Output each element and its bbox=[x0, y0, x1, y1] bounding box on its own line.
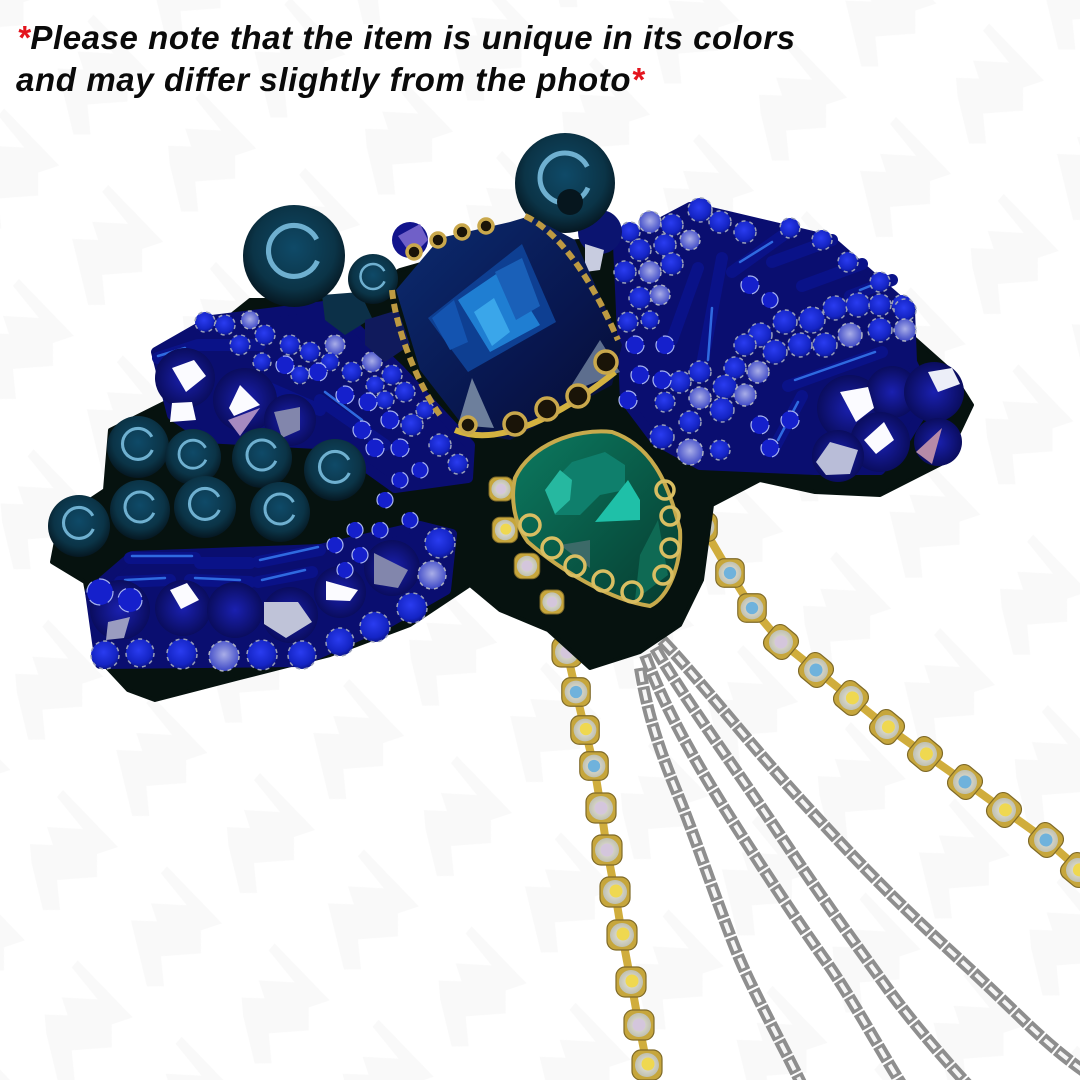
black felt backing bbox=[52, 240, 972, 700]
right rhinestone chain bbox=[689, 513, 1080, 891]
right wing: blue base bbox=[618, 207, 930, 470]
top ring settings bbox=[407, 219, 493, 259]
gold chain border of the sapphire bbox=[392, 216, 618, 415]
left rhinestone chain bbox=[552, 637, 662, 1080]
green teardrop gem bbox=[513, 431, 680, 606]
note text: *Please note that the item is unique in its colors bbox=[17, 19, 795, 56]
side rhinestones by the emerald bbox=[489, 477, 564, 614]
note text bbox=[16, 19, 795, 98]
note text: and may differ slightly from the photo* bbox=[16, 61, 646, 98]
gold scalloped setting of the emerald bbox=[520, 481, 679, 602]
crystal beads, right cluster bbox=[812, 362, 964, 482]
left upper wing: blue base bbox=[156, 305, 470, 488]
large teal pearls at top bbox=[243, 133, 615, 307]
left lower wing: blue base bbox=[90, 526, 452, 664]
crystal beads, left upper bbox=[155, 348, 316, 446]
silver chains hanging from the brooch bbox=[640, 640, 1080, 1080]
bugle beads bbox=[120, 236, 892, 582]
large sapphire square gem bbox=[392, 216, 622, 440]
dark crystal beads and accent bead beside the sapphire bbox=[322, 210, 622, 362]
cluster of teal pearls bbox=[48, 416, 366, 557]
crystal beads, left lower bbox=[90, 540, 420, 643]
blue rhinestones bbox=[87, 198, 916, 671]
bottom gold scalloped setting bbox=[455, 351, 617, 435]
